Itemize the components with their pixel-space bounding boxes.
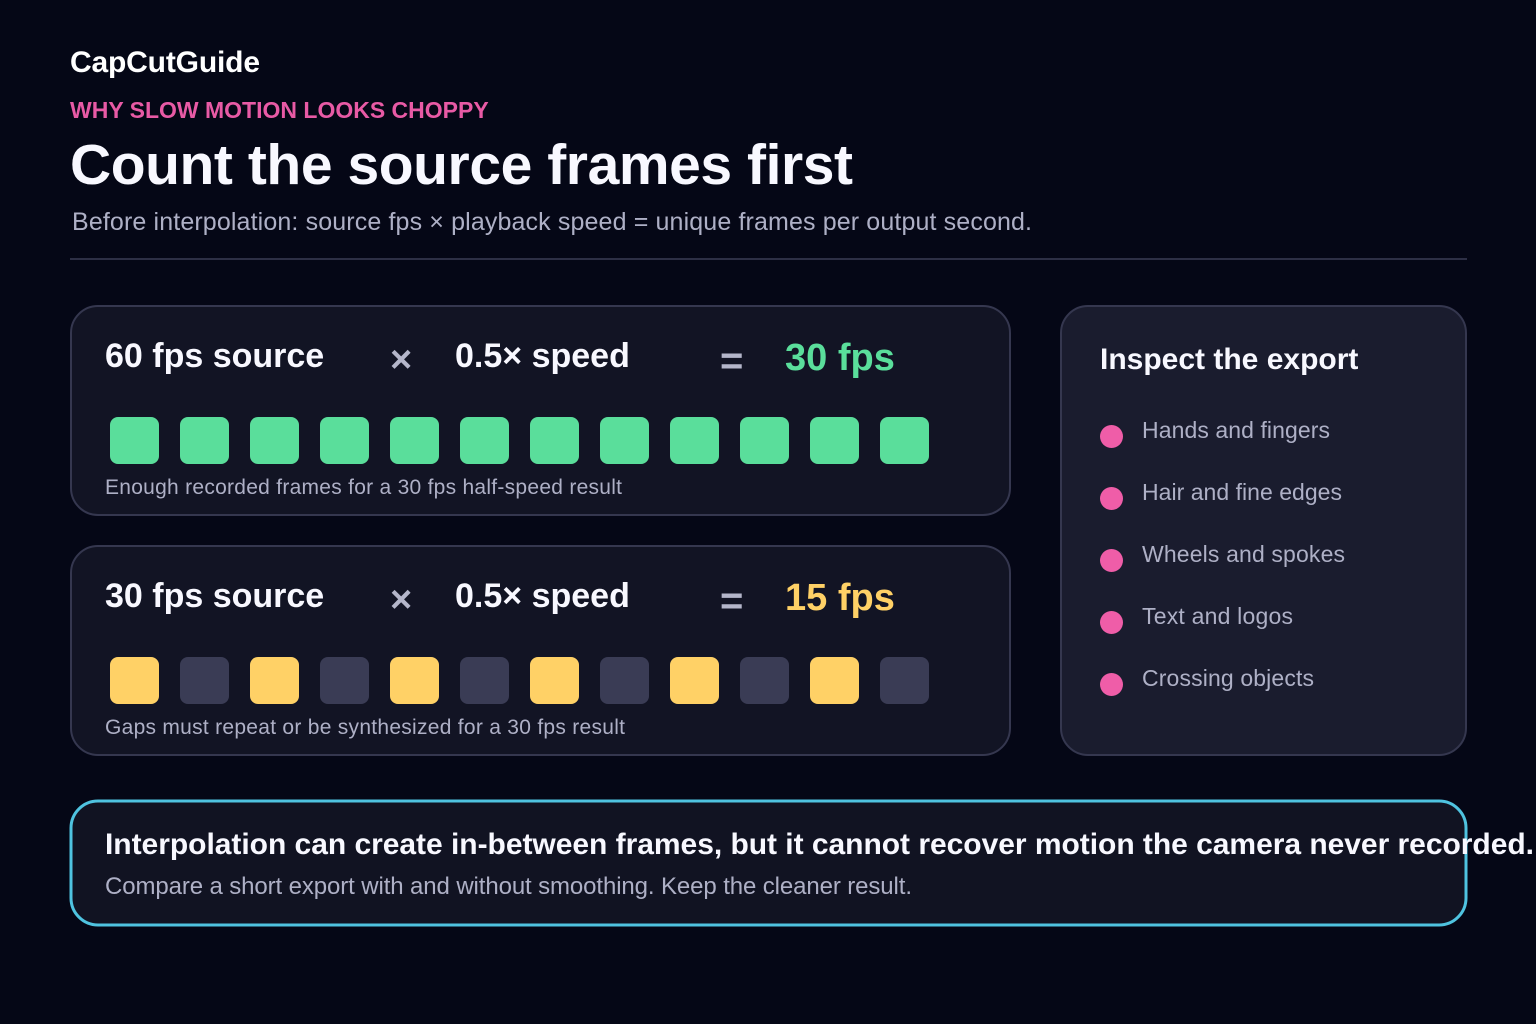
checklist item bbox=[1100, 665, 1314, 696]
checklist item: Crossing objects bbox=[1142, 665, 1314, 691]
checklist item bbox=[1100, 603, 1293, 634]
checklist item: Text and logos bbox=[1142, 603, 1293, 629]
checklist item bbox=[1100, 479, 1342, 510]
checklist item: Hands and fingers bbox=[1142, 417, 1330, 443]
checklist item: Wheels and spokes bbox=[1142, 541, 1345, 567]
frame strip: 6 recorded frames and 6 gaps bbox=[110, 657, 929, 704]
multiply sign: × bbox=[390, 579, 412, 621]
equals sign: = bbox=[720, 339, 743, 383]
equation speed: 0.5× speed bbox=[455, 577, 630, 615]
callout detail: Compare a short export with and without smoothing. Keep the cleaner result. bbox=[105, 873, 912, 900]
frame caption: Gaps must repeat or be synthesized for a 30 fps result bbox=[105, 716, 625, 739]
panel: 30 fps source bbox=[71, 546, 1010, 755]
checklist item bbox=[1100, 541, 1345, 572]
panel: inspect the export bbox=[1061, 306, 1466, 755]
equation speed: 0.5× speed bbox=[455, 337, 630, 375]
callout headline: Interpolation can create in-between frames, but it cannot recover motion the camera never recorded. bbox=[105, 828, 1534, 861]
result: 30 fps: 30 fps bbox=[785, 337, 895, 379]
multiply sign: × bbox=[390, 339, 412, 381]
subtitle: Before interpolation: source fps × playback speed = unique frames per output second. bbox=[72, 208, 1032, 236]
result: 15 fps: 15 fps bbox=[785, 577, 895, 619]
callout bbox=[71, 801, 1534, 925]
title: Count the source frames first bbox=[70, 133, 853, 197]
panel heading: Inspect the export bbox=[1100, 343, 1358, 376]
brand name: CapCutGuide bbox=[70, 46, 260, 79]
equation source: 30 fps source bbox=[105, 577, 324, 615]
equation source: 60 fps source bbox=[105, 337, 324, 375]
checklist item: Hair and fine edges bbox=[1142, 479, 1342, 505]
equals sign: = bbox=[720, 579, 743, 623]
checklist item bbox=[1100, 417, 1330, 448]
frame strip: 12 recorded frames bbox=[110, 417, 929, 464]
eyebrow: WHY SLOW MOTION LOOKS CHOPPY bbox=[70, 97, 489, 123]
panel: 60 fps source bbox=[71, 306, 1010, 515]
frame caption: Enough recorded frames for a 30 fps half-speed result bbox=[105, 476, 622, 499]
